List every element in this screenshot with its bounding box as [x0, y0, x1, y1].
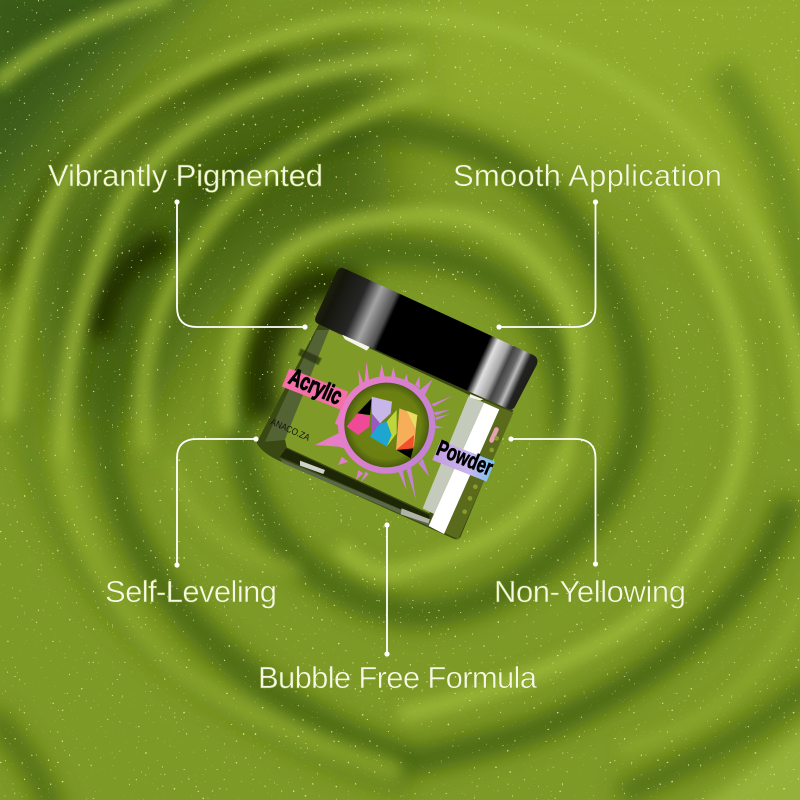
Powder label band: Powder [433, 435, 497, 481]
faceted logo [347, 397, 417, 458]
callout: Non-Yellowing [494, 436, 686, 609]
callout: Self-Leveling [105, 436, 277, 609]
callout: Self-Leveling: Self-Leveling [105, 574, 277, 609]
pink splatter ring [315, 362, 453, 501]
acrylic powder jar [257, 268, 537, 539]
callout: Vibrantly Pigmented [48, 158, 323, 330]
callout: Vibrantly Pigmented: Vibrantly Pigmented [48, 158, 323, 193]
website text on jar: ANACO.ZA [269, 417, 312, 443]
callout: Non-Yellowing: Non-Yellowing [494, 574, 686, 609]
Powder label band [432, 435, 497, 482]
callout: Smooth Application [453, 158, 722, 330]
jar body [257, 322, 513, 539]
Acrylic label band [282, 363, 348, 411]
callout: Bubble Free Formula [258, 522, 538, 695]
callout: Bubble Free Formula: Bubble Free Formula [258, 660, 538, 695]
Acrylic label band: Acrylic [285, 363, 346, 411]
callout: Smooth Application: Smooth Application [453, 158, 722, 193]
jar lid [315, 268, 537, 409]
